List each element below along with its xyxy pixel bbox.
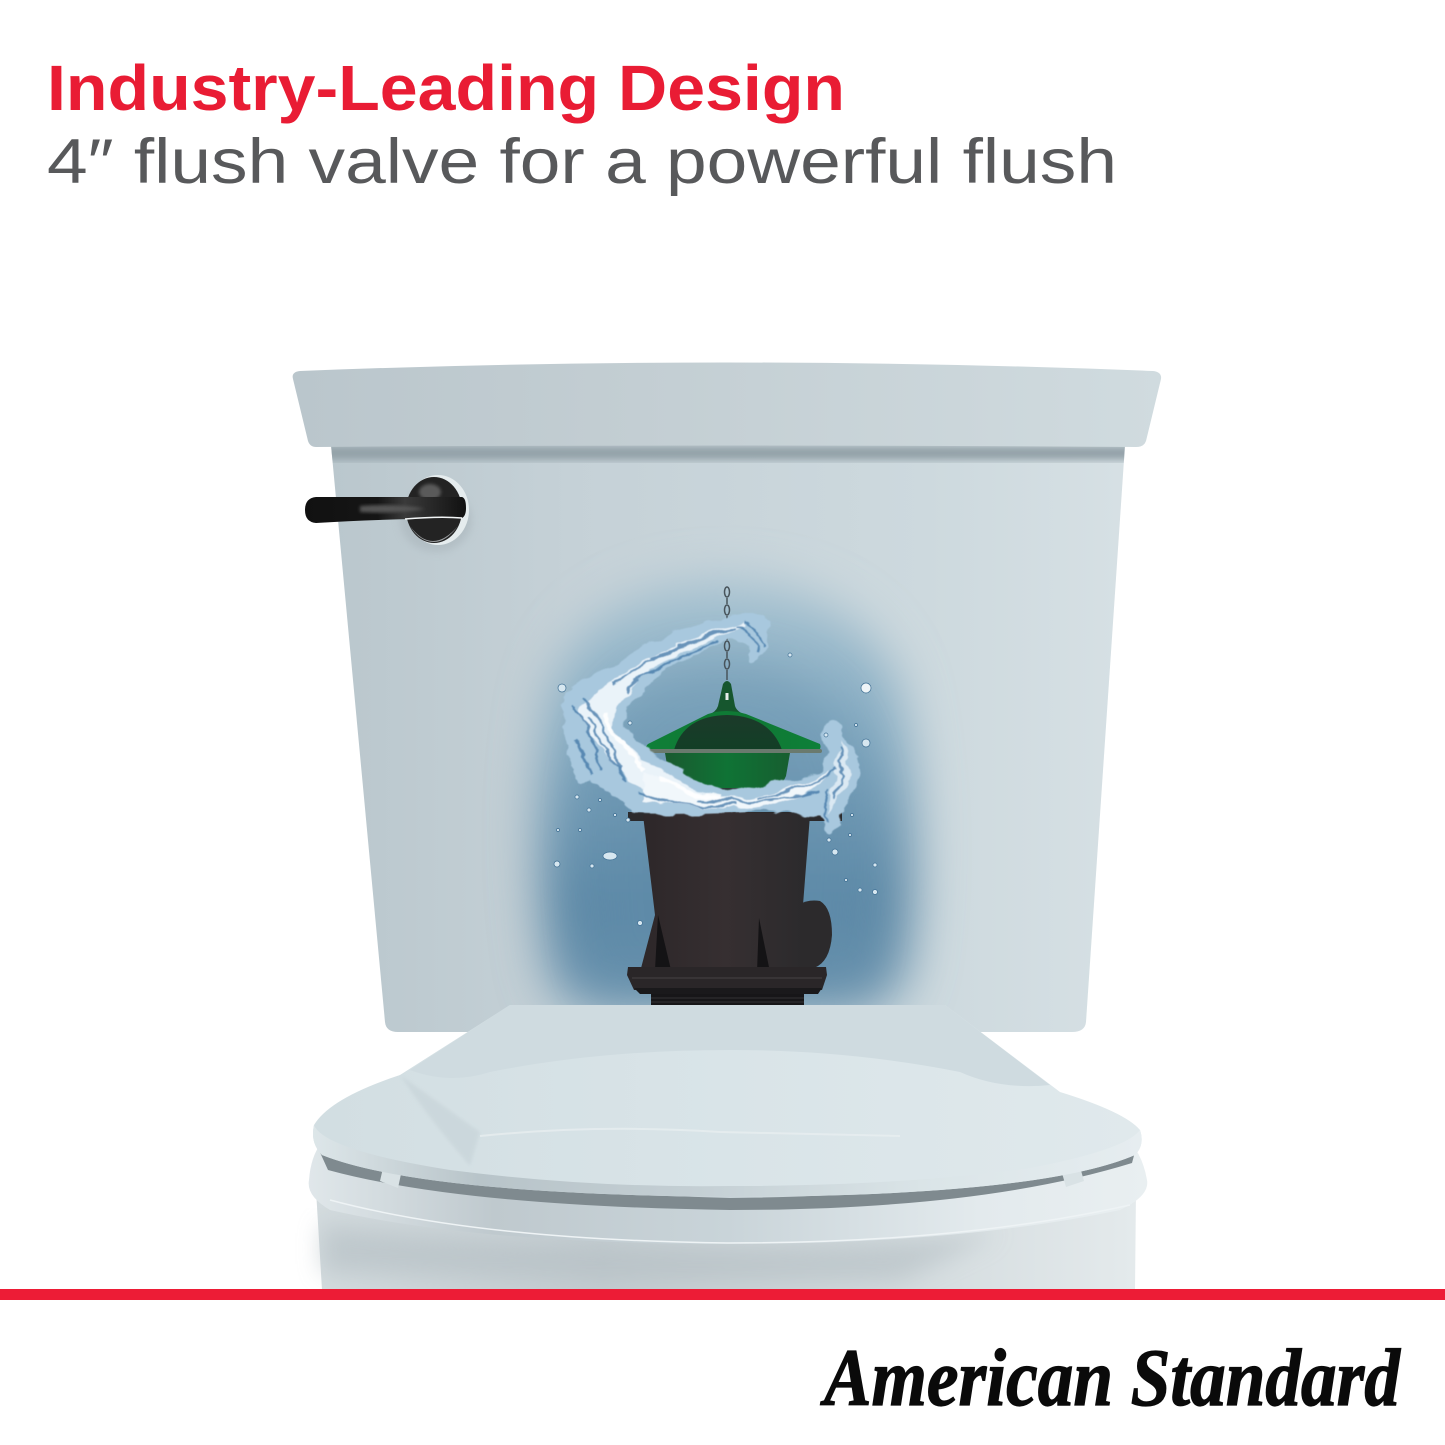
flush handle: [305, 475, 472, 552]
toilet seat lid: [313, 1005, 1142, 1197]
water swirl: [566, 616, 858, 832]
chain: [724, 587, 730, 680]
red divider band: [0, 1289, 1445, 1300]
tank lid: [293, 362, 1161, 447]
bowl rim: [309, 1130, 1147, 1244]
toilet illustration: [293, 362, 1161, 1290]
tank body: [320, 445, 1135, 1032]
subtitle: 4 inch flush valve: 4″ flush valve for a powerful flush: [47, 127, 1117, 197]
blue water glow: [539, 582, 915, 1012]
flush valve assembly: [554, 587, 878, 1006]
green flapper: [646, 681, 822, 796]
water droplets: [554, 653, 878, 926]
white footer background: [0, 1300, 1445, 1445]
black valve body: [627, 812, 842, 1006]
gap under seat: [318, 1148, 1136, 1210]
title: Industry-Leading Design: Industry-Leading Design: [47, 52, 845, 124]
bowl base: [312, 1200, 1136, 1289]
